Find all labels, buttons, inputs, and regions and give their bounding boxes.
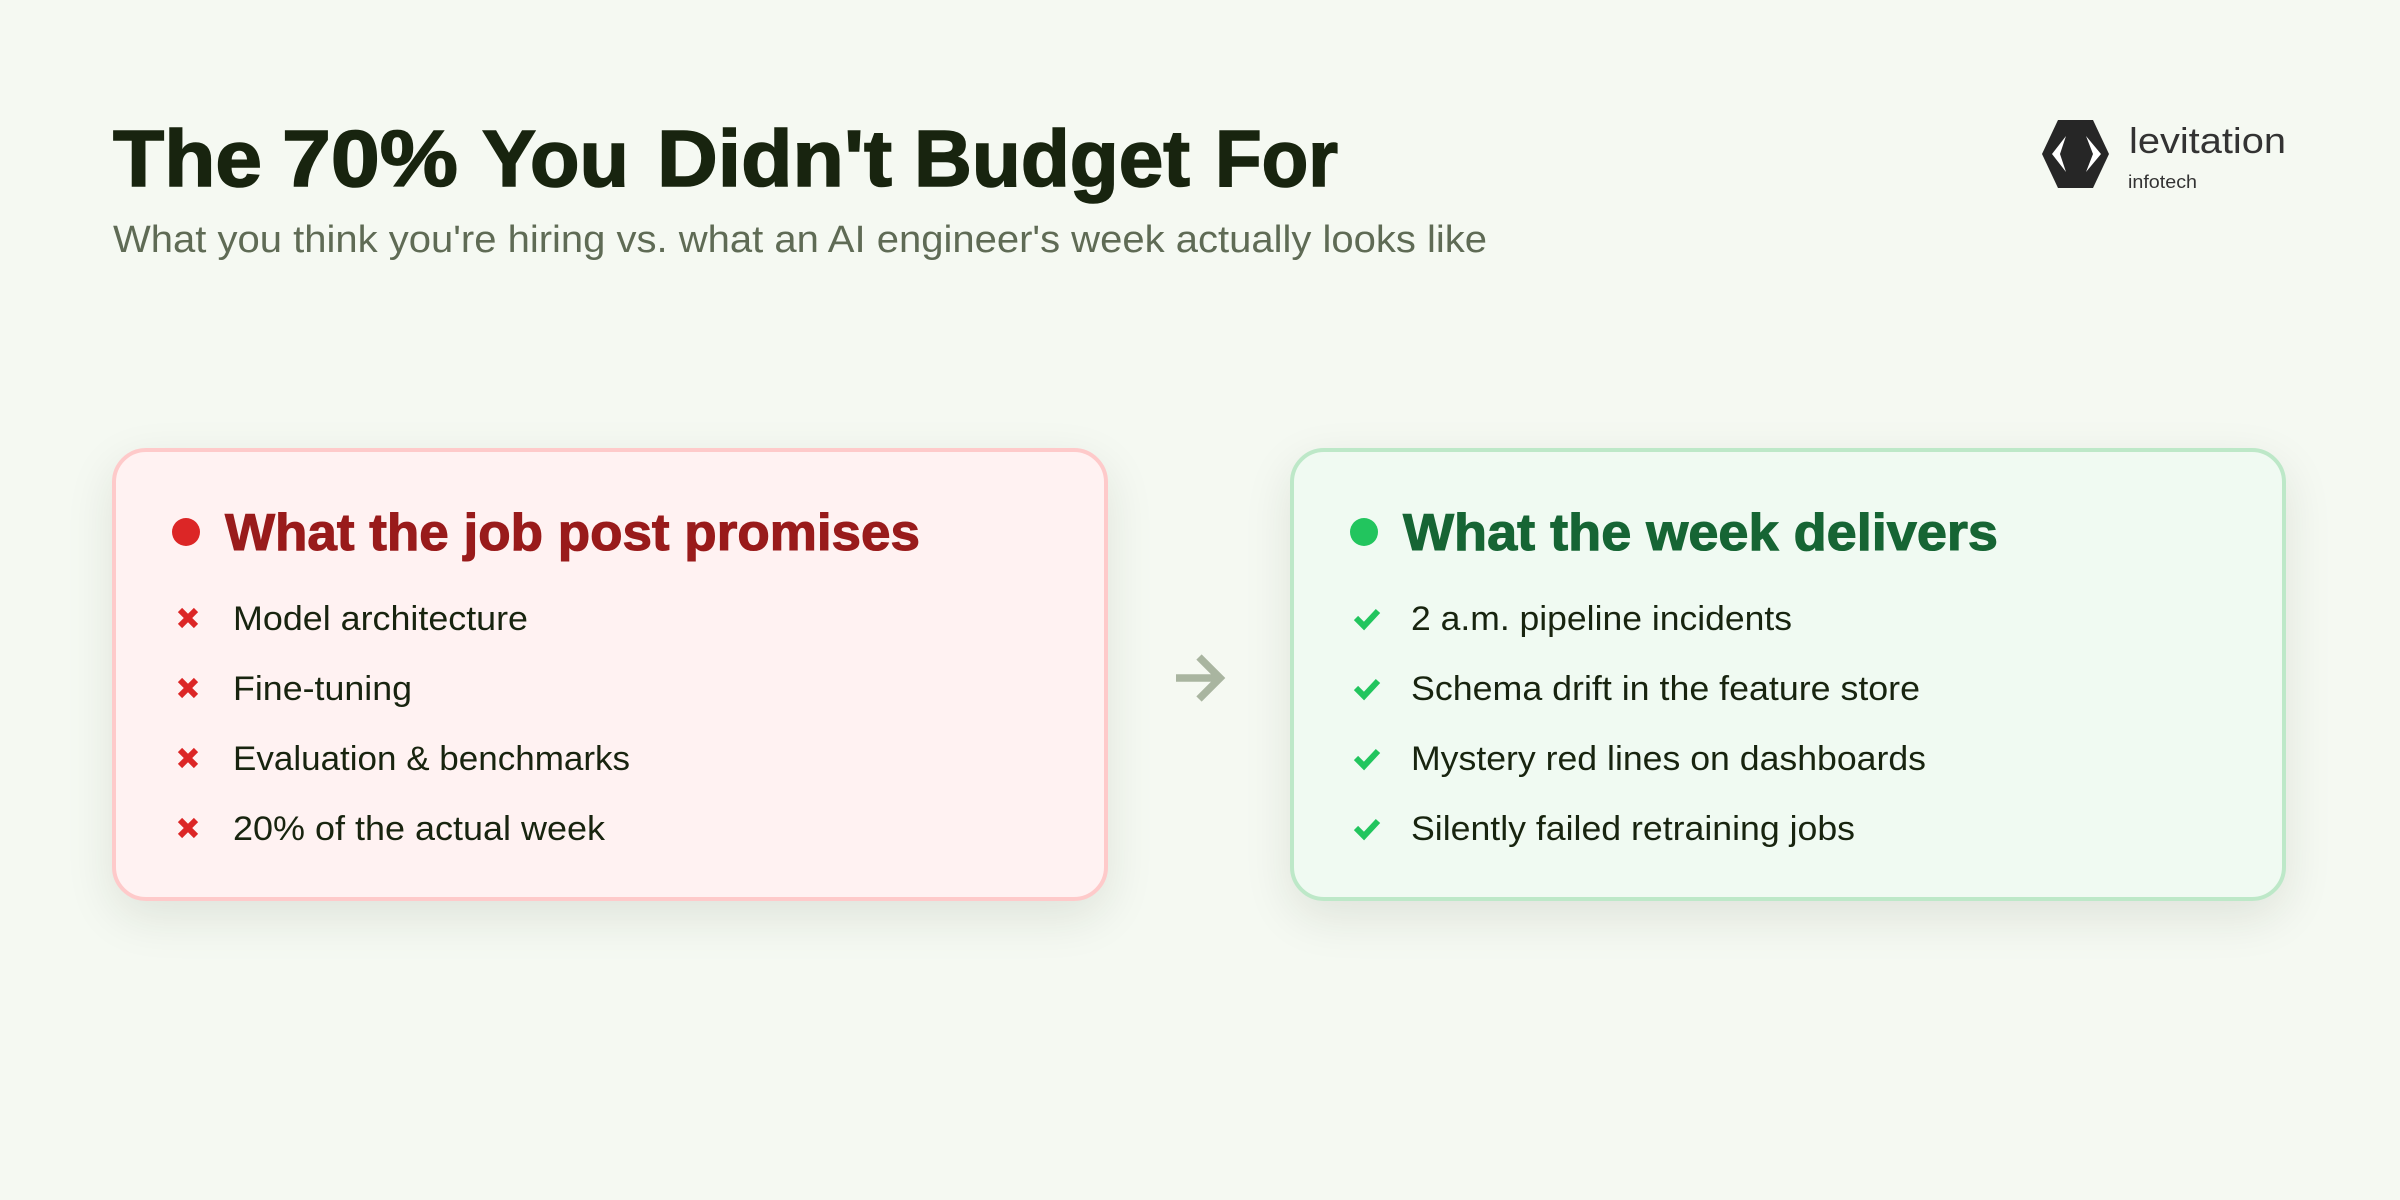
icon: hexagon logo mark xyxy=(2042,120,2109,188)
green status dot xyxy=(1350,518,1378,546)
title: 70% xyxy=(282,114,458,203)
item: 20% of the actual week: 20% of the actual week xyxy=(233,810,606,848)
title: Didn't xyxy=(657,114,892,203)
subtitle: What you think you're hiring vs. what an AI engineer's week actually looks like xyxy=(113,219,1487,261)
item: fine-tuning: Fine-tuning xyxy=(233,670,412,708)
title: The xyxy=(113,114,262,203)
logo sub-wordmark: infotech xyxy=(2128,172,2197,192)
red status dot xyxy=(172,518,200,546)
logo wordmark: levitation xyxy=(2129,120,2286,161)
title: Budget xyxy=(914,114,1190,203)
panel heading: What the week delivers xyxy=(1403,504,1998,562)
item: 2 a.m. pipeline incidents: 2 a.m. pipeline incidents xyxy=(1411,600,1792,638)
item: mystery red lines: Mystery red lines on dashboards xyxy=(1411,740,1926,778)
item: schema drift: Schema drift in the feature store xyxy=(1411,670,1920,708)
title: For xyxy=(1215,114,1338,203)
panel: what the week delivers xyxy=(1290,448,2286,901)
item: silently failed retraining jobs: Silently failed retraining jobs xyxy=(1411,810,1855,848)
item: evaluation and benchmarks: Evaluation & benchmarks xyxy=(233,740,630,778)
title: You xyxy=(482,114,629,203)
panel: what the job post promises xyxy=(112,448,1108,901)
item: model architecture: Model architecture xyxy=(233,600,528,638)
panel heading: What the job post promises xyxy=(225,504,920,562)
